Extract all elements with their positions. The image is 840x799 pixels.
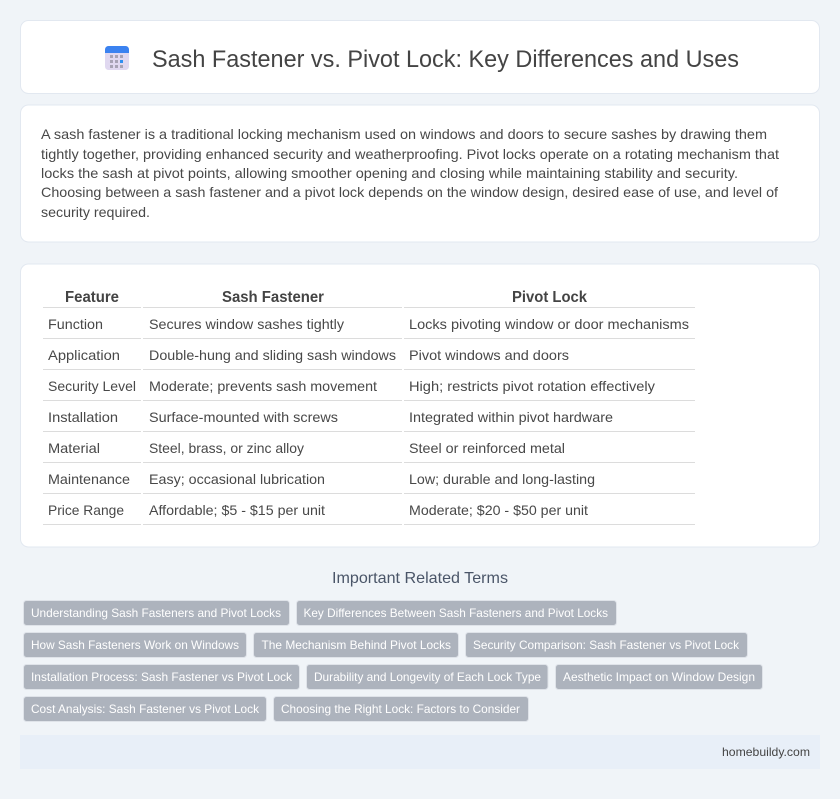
table row: Price Range: Moderate; $20 - $50 per unit <box>409 502 588 518</box>
panel: description <box>20 105 820 242</box>
table row: Security Level: Moderate; prevents sash movement <box>149 378 377 394</box>
table row: Security Level: High; restricts pivot rotation effectively <box>409 378 655 394</box>
tag: Aesthetic Impact on Window Design <box>563 670 755 684</box>
text block: description paragraph: A sash fastener is a traditional locking mechanism used on windows and doors to secure sashes by drawing them <box>41 126 767 142</box>
table row: Installation: Surface-mounted with screws <box>149 409 338 425</box>
table row: Function: Function <box>48 316 103 332</box>
tag <box>24 600 290 626</box>
table row: Function: Locks pivoting window or door mechanisms <box>409 316 689 332</box>
panel: comparison table <box>20 264 820 547</box>
footer source text: homebuildy.com <box>722 745 810 759</box>
table row: Application <box>43 347 695 370</box>
tag: Understanding Sash Fasteners and Pivot Locks <box>31 606 281 620</box>
table row: Application: Pivot windows and doors <box>409 347 569 363</box>
tag <box>306 664 548 690</box>
table row: Maintenance: Easy; occasional lubrication <box>149 471 325 487</box>
table row: Material <box>43 440 695 462</box>
tag: Durability and Longevity of Each Lock Type <box>314 670 541 684</box>
tag: How Sash Fasteners Work on Windows <box>31 638 239 652</box>
text block: description paragraph: security required. <box>41 204 150 220</box>
text block: description paragraph: Choosing between a sash fastener and a pivot lock depends on the window design, desired ease of use, and level of <box>41 184 778 200</box>
tag: The Mechanism Behind Pivot Locks <box>262 638 451 652</box>
table row: Security Level <box>43 378 695 400</box>
tag <box>24 696 266 722</box>
tag <box>24 664 300 690</box>
title: Sash Fastener vs. Pivot Lock: Key Differences and Uses <box>152 46 739 73</box>
table row: Function <box>43 316 695 338</box>
table row: Material: Steel, brass, or zinc alloy <box>149 440 304 456</box>
footer <box>20 735 820 769</box>
tag: Security Comparison: Sash Fastener vs Pivot Lock <box>473 638 740 652</box>
heading: related terms: Important Related Terms <box>332 570 508 587</box>
related terms tags <box>24 600 762 722</box>
table row: Application: Double-hung and sliding sash windows <box>149 347 396 363</box>
tag <box>24 632 246 658</box>
table row: Maintenance: Maintenance <box>48 471 130 487</box>
table row: Installation: Installation <box>48 409 118 425</box>
table row: Material: Steel or reinforced metal <box>409 440 565 456</box>
text block: description paragraph: locks the sash at pivot points, allowing smoother opening and closing while maintaining stability and security. <box>41 165 738 181</box>
table row: Application: Application <box>48 347 120 363</box>
text block: description paragraph <box>41 126 779 220</box>
table row: Security Level: Security Level <box>48 378 136 394</box>
table row: Price Range: Price Range <box>48 502 124 518</box>
icon: calendar <box>105 46 129 70</box>
table header row: Feature <box>65 289 119 306</box>
table row: Installation: Integrated within pivot hardware <box>409 409 613 425</box>
tag <box>466 632 748 658</box>
table row: Maintenance: Low; durable and long-lasting <box>409 471 595 487</box>
tag: Key Differences Between Sash Fasteners and Pivot Locks <box>304 606 608 620</box>
table row: Function: Secures window sashes tightly <box>149 316 344 332</box>
table row: Material: Material <box>48 440 100 456</box>
table header row: Sash Fastener <box>222 289 324 306</box>
text block: description paragraph: tightly together, providing enhanced security and weatherproofing. Pivot locks operate on a rotating mechanism that <box>41 146 779 162</box>
table header row: Pivot Lock <box>512 289 587 306</box>
tag <box>296 600 616 626</box>
tag: Cost Analysis: Sash Fastener vs Pivot Lock <box>31 702 260 716</box>
table row: Maintenance <box>43 471 695 494</box>
tag <box>274 696 528 722</box>
tag: Choosing the Right Lock: Factors to Consider <box>281 702 520 716</box>
tag: Installation Process: Sash Fastener vs Pivot Lock <box>31 670 293 684</box>
table header row <box>43 289 695 308</box>
table row: Price Range: Affordable; $5 - $15 per unit <box>149 502 325 518</box>
tag <box>254 632 458 658</box>
panel: header <box>20 20 820 94</box>
tag <box>556 664 762 690</box>
table row: Installation <box>43 409 695 432</box>
table row: Price Range <box>43 502 695 524</box>
